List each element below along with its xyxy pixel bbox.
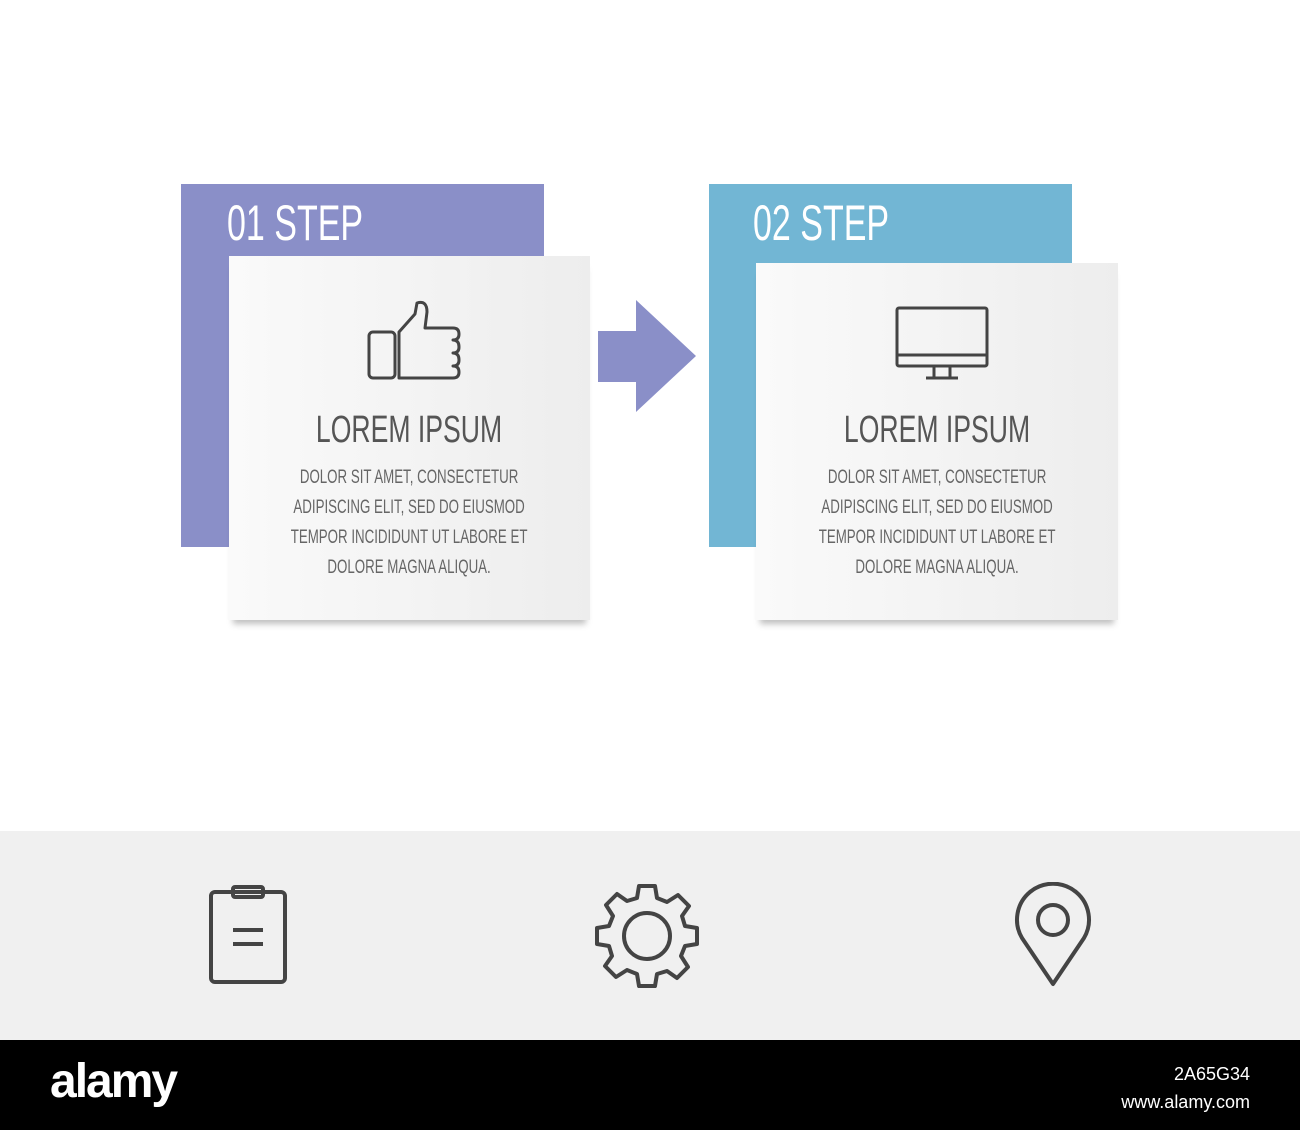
step 2 color block [709,184,1072,547]
icon: location pin [1014,882,1091,986]
step 1 title: LOREM IPSUM [316,409,503,451]
icon: gear [595,884,699,988]
step 2 card [756,263,1118,620]
step 1 text: DOLOR SIT AMET, CONSECTETUR [300,467,519,488]
step 1 text: ADIPISCING ELIT, SED DO EIUSMOD [294,497,525,518]
step 1 label: 01 STEP [227,195,363,251]
icon: monitor [896,306,988,380]
footer logo: alamy [50,1055,176,1108]
step 2 label: 02 STEP [753,195,889,251]
step 2 text: DOLOR SIT AMET, CONSECTETUR [828,467,1046,488]
footer id text: www.alamy.com [1121,1092,1250,1112]
step 1 text: TEMPOR INCIDIDUNT UT LABORE ET [291,527,528,548]
panel: step 1 [181,184,590,628]
arrow [598,300,696,412]
step 1 text [291,467,528,578]
icon: clipboard [209,885,287,984]
step 1 color block [181,184,544,547]
footer id text: 2A65G34 [1174,1064,1250,1084]
panel: step 2 [709,184,1118,628]
step 2 text: DOLORE MAGNA ALIQUA. [855,557,1019,578]
footer id text [1121,1064,1250,1112]
step 2 text [819,467,1056,578]
icon: thumbs up [368,300,460,380]
footer bar [0,1040,1300,1130]
step 2 title: LOREM IPSUM [844,409,1030,451]
bottom icon band [0,831,1300,1040]
step 2 text: TEMPOR INCIDIDUNT UT LABORE ET [819,527,1055,548]
step 1 text: DOLORE MAGNA ALIQUA. [328,557,491,578]
step 2 text: ADIPISCING ELIT, SED DO EIUSMOD [821,497,1053,518]
step 1 card [229,256,590,620]
